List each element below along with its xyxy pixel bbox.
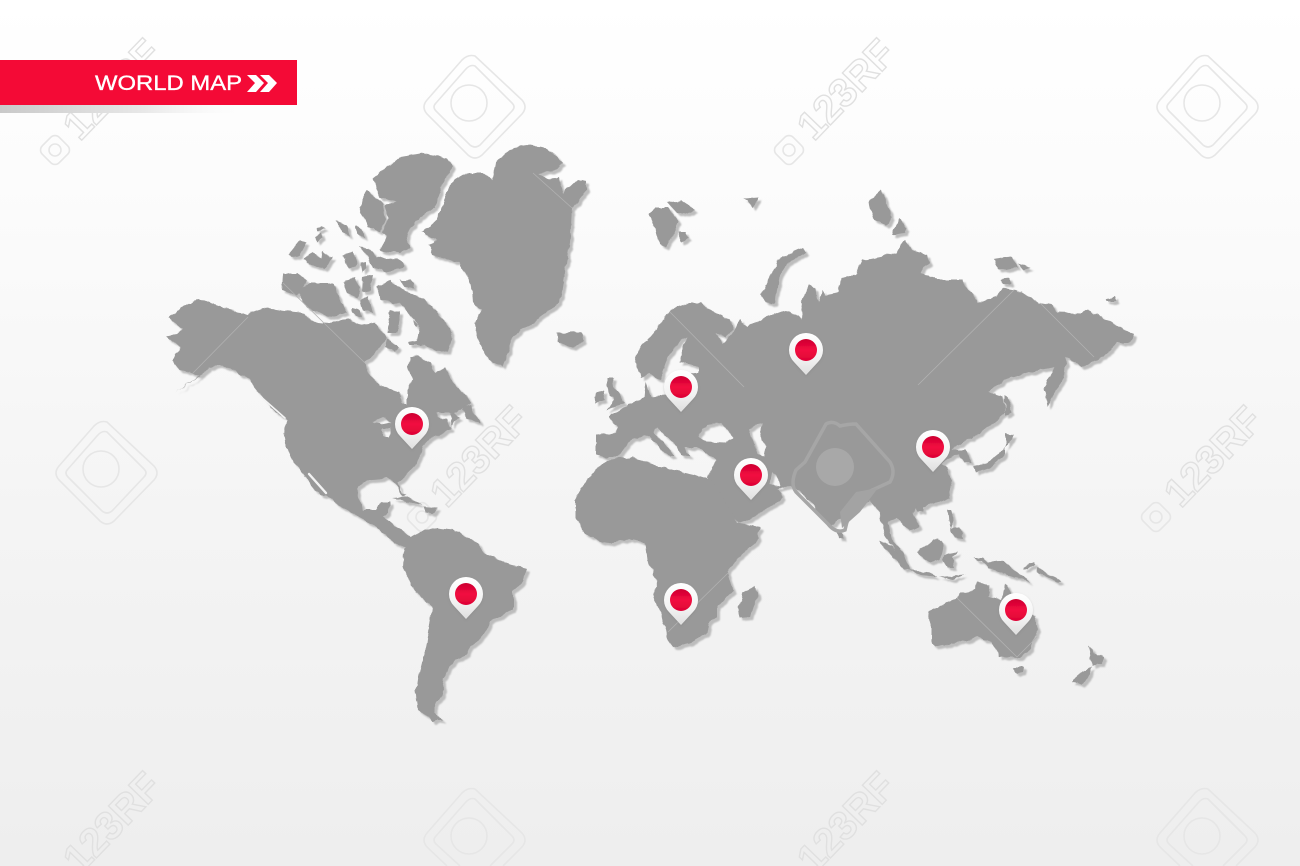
icon: double chevron (247, 75, 277, 92)
south america (402, 528, 527, 720)
watermark text: 123RF (422, 398, 537, 515)
eurasia (594, 190, 1134, 563)
madagascar (738, 585, 757, 618)
banner shadow (0, 105, 240, 113)
watermark text: 123RF (789, 31, 904, 148)
japan and sakhalin (973, 395, 1014, 473)
pin: north america (395, 407, 429, 449)
australia (928, 582, 1038, 674)
pin: australia (999, 593, 1033, 635)
north america (167, 299, 480, 547)
title banner (0, 60, 297, 113)
pin: middle east (734, 458, 768, 500)
small logo marks (38, 133, 1173, 534)
thin watermark lines across the map (193, 173, 1094, 657)
world map (167, 145, 1134, 720)
pin: europe (664, 370, 698, 412)
greenland (422, 145, 587, 367)
watermark text: 123RF (55, 31, 170, 148)
arctic russian islands (650, 190, 1116, 303)
iceland (557, 332, 585, 348)
title: WORLD MAP (95, 72, 242, 95)
pin: south america (449, 577, 483, 619)
southeast asia islands (879, 510, 1062, 582)
pin: china (916, 430, 950, 472)
newfoundland (462, 405, 480, 423)
arctic canada islands (282, 153, 453, 353)
sri lanka and taiwan (836, 490, 950, 540)
great britain and ireland (594, 377, 625, 410)
banner background (0, 60, 297, 105)
pin: russia (789, 333, 823, 375)
gulf and coastal slivers (260, 396, 326, 493)
central watermark on map (793, 422, 893, 531)
caribbean islands (393, 497, 437, 513)
watermark text: 123RF (1156, 398, 1271, 515)
new zealand (1072, 645, 1103, 685)
pin: southern africa (664, 583, 698, 625)
africa (575, 457, 760, 647)
